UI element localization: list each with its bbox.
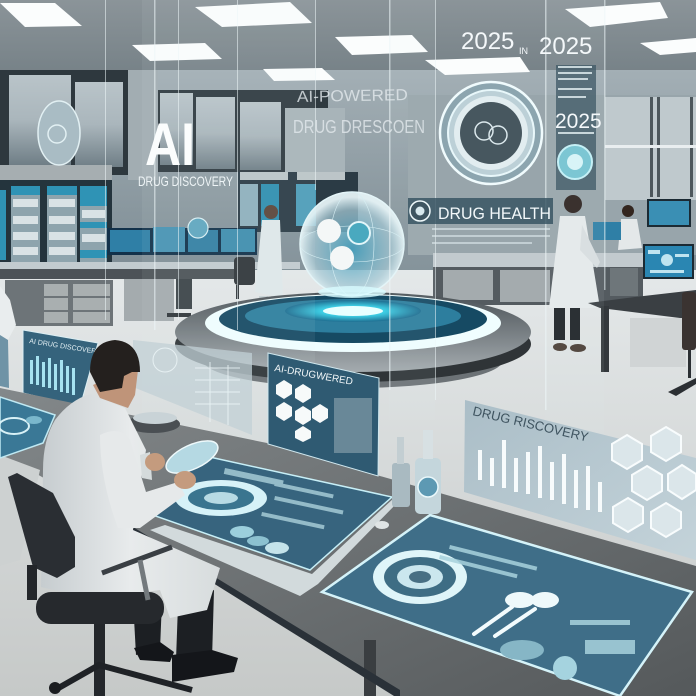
hologram sphere with molecule <box>300 192 404 298</box>
glass panel: drug discovery bar chart with hexagons: DRUG RISCOVERY <box>471 403 590 445</box>
glass panel: drug discovery bar chart with hexagons <box>464 400 696 560</box>
year labels 2025 <box>461 28 602 133</box>
screen: middle desk panel <box>144 456 392 570</box>
back windows centre <box>158 90 345 172</box>
front desk <box>0 388 696 696</box>
left desk wing edge <box>0 455 40 566</box>
year labels 2025: 2025 <box>461 28 514 55</box>
headline: AI: AI <box>145 111 195 178</box>
background scientist centre-left <box>255 205 283 310</box>
left glass emblem <box>38 101 80 165</box>
label: AI-powered drug discovery <box>293 87 425 137</box>
desk legs <box>364 640 376 696</box>
small round icon right <box>558 145 592 179</box>
year labels 2025: 2025 <box>555 110 602 133</box>
small device on desk <box>126 412 180 433</box>
glass panel: left bar chart <box>23 330 101 407</box>
dark data column right <box>556 65 596 190</box>
right hand <box>174 471 196 489</box>
label: AI-powered drug discovery: DRUG DRESCOEN <box>293 117 425 137</box>
back row of monitors <box>107 218 257 255</box>
back shelves centre <box>238 172 358 232</box>
glass panel: AI-powered hex chart: AI-DRUGWERED <box>273 363 354 388</box>
glass bottles <box>375 430 441 529</box>
label: AI-powered drug discovery: AI-POWERED <box>297 87 408 106</box>
glass wall panes <box>142 0 604 470</box>
white coat body <box>41 394 220 618</box>
left hand and forearm <box>140 452 165 480</box>
right monitors <box>593 200 693 278</box>
desk front edge <box>133 527 400 696</box>
background: floor <box>0 270 696 696</box>
chair background <box>167 257 255 317</box>
seated scientist <box>8 340 238 696</box>
scientist far right <box>618 205 642 250</box>
neck and face <box>93 370 138 408</box>
glass panel: charts behind seated person <box>133 340 252 435</box>
holographic circular emblem <box>440 82 542 184</box>
desk rim highlight <box>150 497 398 596</box>
held holographic tablet <box>162 434 222 480</box>
screen: left desk tablet <box>0 397 55 458</box>
arm <box>100 431 185 528</box>
label: drug health with band <box>408 198 553 244</box>
label: drug health with band: DRUG HEALTH <box>438 204 551 223</box>
glass panel: AI-powered hex chart <box>268 353 379 476</box>
right back wall shelves <box>408 95 696 305</box>
screen: main front desk panel <box>322 515 692 696</box>
left counter with drawers <box>0 262 300 326</box>
background: ceiling <box>0 0 696 100</box>
background: back wall <box>0 70 696 280</box>
label: drug discovery left: DRUG DISCOVERY <box>138 173 233 189</box>
partial scientist sleeve at left edge <box>0 286 16 388</box>
right desk <box>588 290 696 396</box>
hologram platform <box>175 292 531 388</box>
ceiling lights <box>0 2 696 81</box>
hair <box>90 340 140 392</box>
glass panel: left bar chart: AI DRUG DISCOVERY <box>29 338 101 356</box>
trousers and shoes <box>133 590 238 682</box>
left shelves of vials <box>0 165 112 268</box>
left windows <box>0 70 158 180</box>
year labels 2025: 2025 <box>539 33 592 60</box>
office chair <box>8 473 192 696</box>
year labels 2025: IN <box>519 46 528 56</box>
scientist right with white coat <box>549 195 600 352</box>
